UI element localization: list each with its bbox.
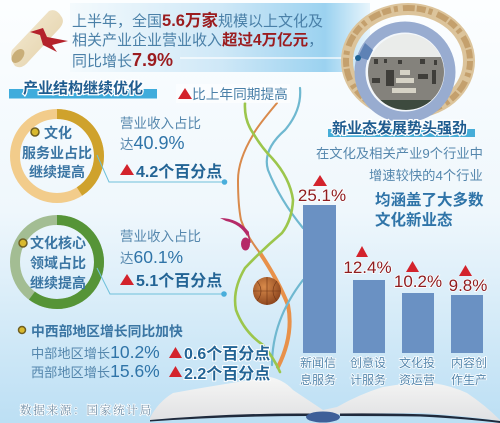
text: revenue share 40.9%	[120, 116, 222, 181]
panel: central and western regions	[18, 323, 270, 383]
header band	[70, 3, 370, 72]
panel: cultural services share	[15, 114, 227, 198]
bar: content creation 9.8%: 内容创	[451, 355, 487, 370]
bar: cultural investment 10.2%: 文化投	[399, 355, 435, 370]
panel: core culture share	[15, 220, 227, 304]
panel: central and western regions: 西部地区增长15.6%	[31, 361, 160, 381]
text: revenue share 40.9%: 达40.9%	[120, 133, 185, 153]
text: revenue share 60.1%: 5.1个百分点	[136, 271, 222, 290]
bar: creative design 12.4%: 创意设	[350, 355, 386, 370]
bar: news information 25.1%: 息服务	[300, 372, 336, 387]
heading: 产业结构继续优化: 产业结构继续优化	[23, 79, 143, 97]
intro text: 上半年，全国5.6万家规模以上文化及	[72, 10, 323, 30]
bar: cultural investment 10.2%: 资运营	[399, 373, 435, 387]
bar: cultural investment 10.2%	[394, 261, 442, 387]
icon: open book	[150, 377, 500, 423]
header leader line	[180, 57, 358, 59]
donut label: 继续提高	[29, 164, 85, 180]
intro text: 同比增长7.9%	[72, 50, 173, 70]
bar: creative design 12.4%	[343, 246, 392, 387]
text: new business forms: 均涵盖了大多数	[375, 190, 484, 209]
source note: 数据来源：国家统计局	[20, 403, 153, 417]
text: new business forms: 在文化及相关产业9个行业中	[316, 146, 483, 161]
bar: creative design 12.4%: 计服务	[350, 372, 386, 387]
bar: news information 25.1%	[298, 175, 346, 387]
bar: creative design 12.4%: 12.4%	[343, 258, 392, 277]
text: revenue share 60.1%	[120, 229, 222, 290]
donut label: 文化核心	[30, 235, 86, 251]
icon: scroll with red ribbon	[9, 10, 68, 67]
donut label: 继续提高	[30, 275, 86, 291]
legend: triangle means up from last year	[176, 84, 290, 103]
donut label: 服务业占比	[22, 145, 92, 161]
text: new business forms	[316, 146, 484, 229]
bar: cultural investment 10.2%: 10.2%	[394, 272, 442, 291]
panel: central and western regions: 中西部地区增长同比加快	[31, 323, 183, 339]
heading: 新业态发展势头强劲: 新业态发展势头强劲	[332, 119, 467, 137]
donut label: 领域占比	[30, 255, 86, 271]
donut chart: 40.9%	[15, 114, 99, 198]
text: revenue share 60.1%: 营业收入占比	[120, 229, 201, 244]
bar: content creation 9.8%: 作生产	[451, 373, 487, 387]
donut label	[22, 125, 92, 180]
bar chart: industry growth	[298, 175, 487, 387]
donut label	[19, 235, 86, 291]
donut chart: 60.1%	[15, 220, 99, 304]
bar: content creation 9.8%	[449, 265, 487, 387]
text: revenue share 40.9%: 4.2个百分点	[136, 162, 222, 181]
bar: news information 25.1%: 25.1%	[298, 186, 346, 205]
bar: content creation 9.8%: 9.8%	[449, 276, 487, 295]
intro text: 相关产业企业营业收入超过4万亿元，	[72, 31, 323, 49]
text: new business forms: 增速较快的4个行业	[369, 168, 483, 183]
text: new business forms: 文化新业态	[375, 210, 453, 229]
icon: basketball	[253, 277, 281, 305]
panel: central and western regions: 2.2个百分点	[184, 364, 270, 383]
donut label: 文化	[44, 125, 72, 141]
text: revenue share 40.9%: 营业收入占比	[120, 116, 201, 131]
icon: music note	[220, 218, 250, 250]
icon: gold seal ring with building photo	[346, 8, 470, 117]
decorative ribbons	[235, 88, 303, 372]
panel: central and western regions: 中部地区增长10.2%	[31, 342, 160, 362]
intro text	[72, 10, 323, 70]
legend: triangle means up from last year: 比上年同期提高	[192, 86, 288, 102]
panel: central and western regions: 0.6个百分点	[184, 344, 270, 363]
text: revenue share 60.1%: 达60.1%	[120, 247, 183, 267]
bar: news information 25.1%: 新闻信	[300, 355, 336, 370]
